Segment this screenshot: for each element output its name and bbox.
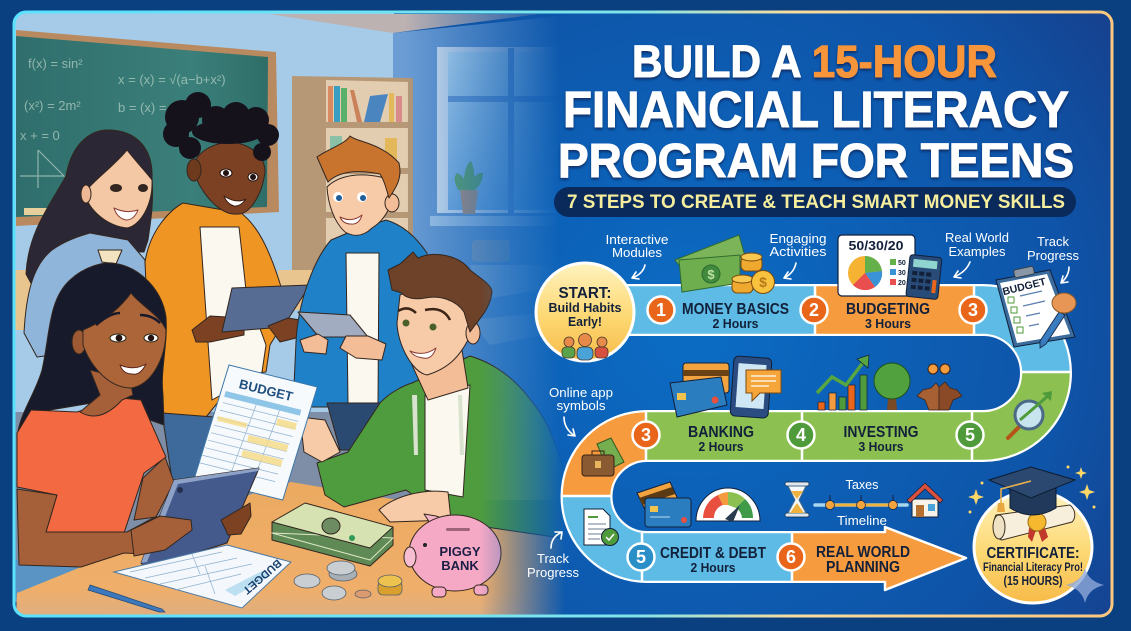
start circle: Early! — [568, 314, 602, 329]
label: online app symbols: Online app — [549, 386, 613, 400]
step 5: credit and debt: 2 Hours — [690, 560, 736, 575]
step 4: investing — [788, 422, 918, 454]
icon: budget clipboard — [996, 266, 1076, 348]
illustration: girl in coral shirt — [17, 263, 259, 568]
icon: sparkles — [968, 466, 1096, 514]
label: track progress top — [1027, 235, 1079, 283]
step 4: investing: INVESTING — [844, 424, 918, 441]
icon: budget clipboard: BUDGET — [1001, 276, 1048, 298]
step 3: banking: 3 — [641, 425, 651, 445]
icon: cash and coins: $ — [707, 267, 715, 282]
step 1: money basics: 1 — [656, 300, 666, 320]
icon: taxes timeline: Timeline — [837, 514, 887, 528]
start circle: START: — [558, 285, 612, 302]
title: PROGRAM FOR TEENS — [558, 135, 1074, 188]
label: real world examples: Real World — [945, 231, 1009, 245]
icon: graduation cap — [989, 467, 1075, 515]
illustration: held budget sheet — [194, 364, 317, 502]
step 5: credit and debt: CREDIT & DEBT — [660, 545, 766, 562]
icon: bank cards and phone — [670, 356, 781, 418]
icon: house — [907, 483, 943, 517]
illustration: budget worksheet on table — [114, 545, 291, 608]
step marker 5 middle — [956, 422, 984, 448]
illustration: piggy bank — [404, 514, 501, 597]
icon: cash and coins: $ — [759, 274, 767, 290]
illustration: classroom background: (x²) = 2m² — [24, 98, 81, 113]
title — [559, 44, 1074, 182]
illustration: classroom background: x = (x) = √(a−b+x²) — [118, 72, 226, 87]
illustration: classroom background: f(x) = sin² — [28, 56, 83, 71]
step marker 3 top: 3 — [968, 300, 978, 320]
step 6: real world planning: PLANNING — [826, 559, 900, 576]
icon: growth chart — [817, 355, 869, 410]
label: interactive modules — [606, 233, 669, 279]
illustration: piggy bank: BANK — [441, 558, 479, 573]
arrow head — [885, 527, 966, 590]
illustration: classroom background: x + = 0 — [20, 128, 60, 143]
label: online app symbols — [549, 386, 613, 436]
label: track progress bottom — [527, 532, 579, 580]
label: engaging activities — [770, 232, 827, 279]
label: engaging activities: Activities — [770, 245, 826, 259]
step marker 3 top — [960, 296, 986, 324]
illustration: boy in green hoodie — [300, 252, 575, 540]
illustration: foreground people and table — [16, 92, 600, 616]
title: FINANCIAL LITERACY — [563, 81, 1069, 138]
certificate circle: (15 HOURS) — [1004, 574, 1062, 588]
icon: tree — [874, 363, 910, 410]
icon: document with check — [584, 509, 618, 546]
illustration: girl in denim shirt — [24, 130, 153, 357]
illustration: budget worksheet on table: BUDGET — [240, 556, 283, 596]
certificate circle: Financial Literacy Pro! — [983, 562, 1083, 574]
certificate circle: CERTIFICATE: — [986, 545, 1080, 562]
icon: 50/30/20 pie card: 50 — [898, 260, 906, 267]
illustration: boy in blue hoodie — [293, 136, 430, 450]
illustration: table — [16, 482, 600, 616]
label: track progress bottom: Progress — [527, 566, 579, 580]
step 6: real world planning — [778, 544, 910, 576]
step 5: credit and debt — [628, 544, 766, 575]
step 2: budgeting: 3 Hours — [865, 316, 911, 331]
label: real world examples — [945, 231, 1009, 278]
title: BUILD A 15-HOUR — [632, 36, 997, 87]
step 3: banking — [632, 422, 754, 454]
illustration: stack of dollars — [272, 503, 393, 566]
icon: 50/30/20 pie card: 50/30/20 — [848, 239, 904, 253]
icon: taxes timeline — [815, 478, 907, 528]
illustration: held budget sheet: BUDGET — [238, 376, 295, 404]
label: online app symbols: symbols — [556, 399, 606, 413]
illustration: pen — [88, 585, 165, 612]
step 1: money basics: 2 Hours — [712, 316, 758, 331]
step 1: money basics — [648, 296, 789, 331]
subtitle banner: 7 STEPS TO CREATE & TEACH SMART MONEY SKILLS — [567, 192, 1065, 213]
icon: 50/30/20 pie card: 20 — [898, 280, 906, 287]
icon: cash and coins — [675, 235, 774, 294]
illustration: piggy bank: PIGGY — [439, 544, 481, 559]
step 4: investing: 3 Hours — [858, 439, 904, 454]
label: real world examples: Examples — [948, 245, 1006, 259]
step 3: banking: BANKING — [688, 424, 754, 441]
illustration: classroom background — [14, 12, 600, 602]
icon: calculator — [906, 254, 942, 300]
step 6: real world planning: REAL WORLD — [816, 544, 910, 561]
icon: bull, bear and owl — [917, 364, 962, 410]
icon: credit gauge — [696, 488, 760, 522]
illustration: classroom background: b = (x) = — [118, 100, 166, 115]
icon: corner star watermark — [1066, 568, 1104, 603]
step 1: money basics: MONEY BASICS — [682, 301, 789, 318]
label: engaging activities: Engaging — [770, 232, 827, 246]
step 2: budgeting — [800, 296, 930, 331]
icon: credit cards — [637, 482, 691, 527]
step marker 5 middle: 5 — [965, 425, 975, 445]
icon: taxes timeline: Taxes — [846, 478, 878, 492]
label: track progress top: Progress — [1027, 249, 1079, 263]
start circle: Build Habits — [548, 300, 622, 315]
step 3: banking: 2 Hours — [698, 439, 744, 454]
label: track progress bottom: Track — [537, 552, 570, 566]
step 6: real world planning: 6 — [786, 547, 796, 567]
icon: 50/30/20 pie card — [838, 235, 915, 296]
step 2: budgeting: 2 — [809, 300, 819, 320]
step 2: budgeting: BUDGETING — [846, 301, 930, 318]
illustration: boy in orange hoodie — [145, 92, 310, 480]
step 5: credit and debt: 5 — [636, 547, 646, 567]
roadmap path — [562, 285, 1071, 581]
step 4: investing: 4 — [796, 425, 806, 445]
start circle — [536, 263, 634, 361]
icon: magnifier — [1008, 391, 1052, 438]
certificate circle — [974, 491, 1092, 603]
icon: 50/30/20 pie card: 30 — [898, 270, 906, 277]
icon: hourglass — [785, 482, 809, 517]
illustration: coins — [294, 561, 402, 600]
label: track progress top: Track — [1037, 235, 1070, 249]
icon: diploma — [993, 505, 1075, 542]
label: interactive modules: Interactive — [606, 233, 669, 247]
icon: briefcase and bills — [582, 438, 624, 476]
subtitle banner — [554, 187, 1076, 217]
label: interactive modules: Modules — [612, 246, 662, 260]
